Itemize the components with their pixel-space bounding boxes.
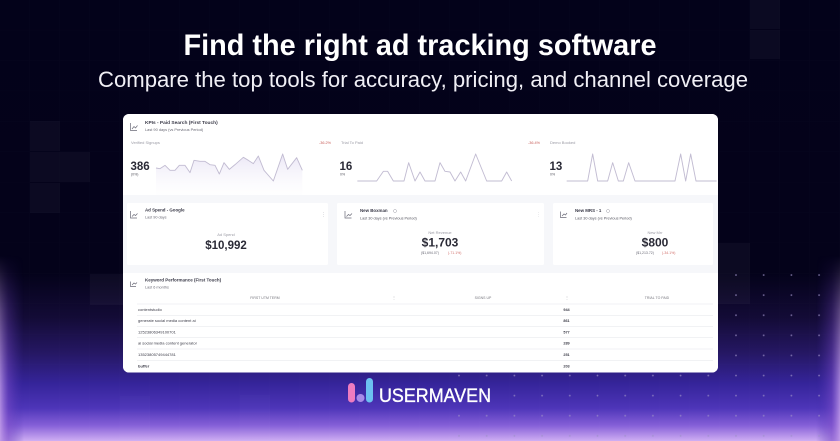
icon: chart	[345, 211, 352, 218]
panel: keyword performance table: 251	[563, 353, 570, 357]
sparkline: signups	[156, 154, 302, 195]
dashboard card	[123, 114, 718, 372]
table header: ⋮	[565, 296, 569, 300]
logo wordmark: USERMAVEN	[379, 385, 491, 407]
panel: ad spend: Ad Spend - Google	[145, 208, 185, 212]
table rows	[137, 304, 713, 360]
KPI: verified signups: Verified Signups	[131, 140, 160, 145]
panel: new MRS: New MRS - 1	[575, 208, 602, 213]
panel: keyword performance table: 203	[563, 364, 570, 368]
KPI: verified signups: (0%)	[131, 172, 138, 176]
panel: keyword performance table	[123, 273, 718, 372]
panel: new boxman: New Boxman	[360, 208, 388, 213]
sparkline: demo booked	[567, 154, 717, 181]
panel: new boxman: Last 30 days (vs Previous Period)	[360, 216, 418, 220]
table header: TRIAL TO PAID	[645, 296, 670, 300]
panel: keyword performance table: Last 6 months	[145, 286, 169, 290]
panel: keyword performance table: contentstudio	[138, 307, 163, 312]
panel: ad spend: $10,992	[205, 240, 247, 252]
table header	[250, 296, 670, 300]
KPI: demo booked	[550, 140, 717, 181]
panel: ad spend	[127, 203, 328, 265]
KPI panel subheading: Last 90 days (vs Previous Period)	[145, 127, 204, 132]
table header: ⋮	[392, 296, 396, 300]
panel: keyword performance table: 289	[563, 342, 570, 346]
KPI: verified signups	[130, 140, 332, 195]
KPI: demo booked: 0%	[550, 172, 555, 176]
KPI: trial to paid: 16	[340, 161, 352, 173]
KPI panel heading: KPIs - Paid Search (First Touch)	[145, 120, 218, 126]
panel: new boxman: Net Revenue	[428, 230, 452, 235]
KPI: demo booked: Demo Booked	[550, 140, 575, 145]
KPI: trial to paid	[340, 140, 541, 181]
panel: ad spend: Ad Spend	[217, 232, 235, 237]
panel: new MRS	[553, 203, 713, 265]
KPI: trial to paid: Trial To Paid	[341, 140, 363, 145]
panel: keyword performance table: 13523805749444781	[138, 352, 177, 357]
panel: KPIs paid search	[123, 114, 718, 195]
panel: new boxman: ⋮	[536, 212, 541, 218]
panel: new MRS: (-34.1%)	[662, 251, 675, 255]
panel: new MRS: New Mrr	[647, 230, 663, 235]
sparkline: trial to paid	[357, 154, 512, 181]
KPI: verified signups: -36.2%	[319, 141, 332, 145]
panel: new MRS: $800	[642, 236, 669, 250]
icon: chart	[560, 212, 567, 218]
table header: SIGNS UP	[475, 296, 492, 300]
panel: new boxman: ($1,694.07)	[421, 251, 439, 255]
panel: new boxman: $1,703	[422, 236, 459, 250]
side glow	[0, 255, 840, 441]
panel: new boxman	[337, 203, 544, 265]
KPI: verified signups: 386	[130, 161, 150, 173]
logo: usermaven	[348, 378, 491, 407]
panel: new boxman: (-71.1%)	[448, 251, 461, 255]
panel: keyword performance table: generate social media content ai	[138, 318, 196, 323]
icon: chart	[130, 123, 138, 130]
icon: chart	[130, 282, 137, 286]
table header: FIRST UTM TERM	[250, 296, 280, 300]
panel: ad spend: Last 90 days	[145, 216, 167, 220]
panel: keyword performance table: 577	[563, 330, 570, 334]
dot grid	[456, 272, 840, 441]
KPI: demo booked: 13	[550, 161, 562, 173]
panel: new MRS: ($1,213.72)	[636, 251, 654, 255]
title: Find the right ad tracking software	[184, 29, 656, 62]
panel: keyword performance table: 12523806349100701	[138, 330, 177, 334]
subtitle: Compare the top tools for accuracy, pricing, and channel coverage	[98, 67, 748, 92]
panel: keyword performance table: ai social media content generator	[138, 340, 198, 346]
icon: logo bars	[348, 378, 373, 402]
KPI: trial to paid: -36.4%	[528, 141, 541, 145]
panel: keyword performance table: 944	[563, 308, 571, 312]
panel: keyword performance table: 861	[563, 319, 570, 323]
icon: chart	[130, 211, 138, 218]
KPI: trial to paid: 0%	[340, 172, 345, 176]
panel: keyword performance table: Keyword Performance (First Touch)	[145, 278, 222, 282]
panel: keyword performance table: buffer	[138, 364, 150, 368]
panel: new MRS: Last 30 days (vs Previous Period)	[575, 216, 633, 220]
panel: ad spend: ⋮	[321, 212, 326, 218]
